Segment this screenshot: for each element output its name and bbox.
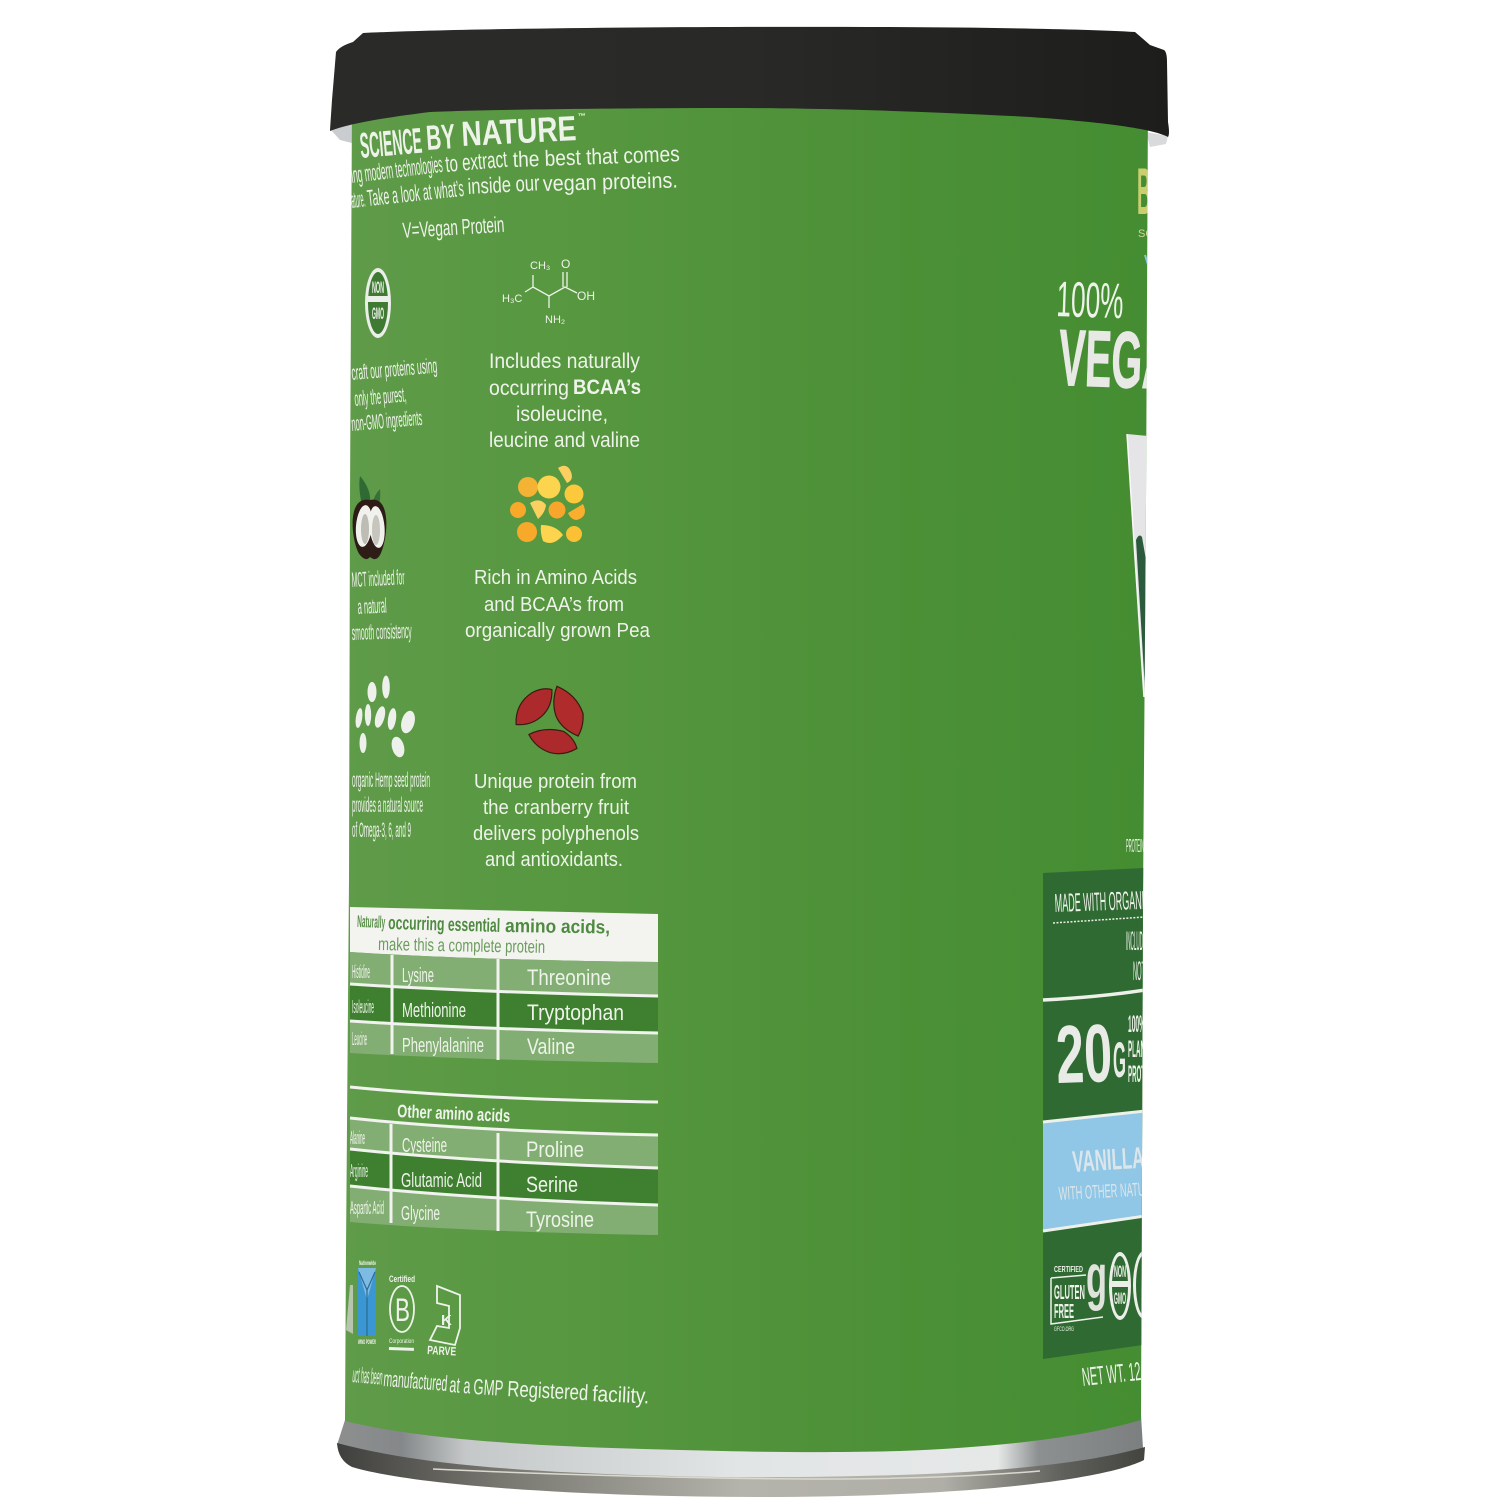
right label content: WITH OTHER NATURAL — [1058, 1179, 1163, 1205]
table: other amino acids: Cysteine — [402, 1135, 447, 1157]
text: GMP statement: manufactured — [383, 1366, 448, 1396]
table: essential amino acids: Threonine — [527, 965, 611, 990]
icon: non-GMO badge — [365, 268, 391, 338]
icon: amino acid molecule: O — [561, 257, 570, 271]
silver rim under lid — [331, 124, 1168, 147]
text: GMP statement: facility. — [592, 1381, 650, 1408]
right label content: B — [1137, 154, 1151, 228]
text: hemp — [352, 769, 430, 842]
headline: 100% vegan — [1058, 282, 1147, 389]
table: other amino acids: Proline — [526, 1137, 584, 1162]
intro text — [352, 148, 680, 208]
intro text: inside our — [467, 170, 540, 199]
icon: amino acid molecule: CH₃ — [530, 260, 550, 272]
icon: certified gluten free: GFCO.ORG — [1054, 1327, 1074, 1333]
headline: 100% vegan: VEGA — [1057, 313, 1172, 406]
table header — [350, 907, 658, 962]
brand letters: SC — [1138, 228, 1153, 240]
text: GMP statement — [352, 1366, 648, 1408]
left label content: organic Hemp seed protein — [352, 769, 430, 792]
text: BCAA: leucine and valine — [489, 429, 640, 452]
black lid — [330, 27, 1169, 137]
dark green panel: PLAN — [1128, 1036, 1145, 1063]
icon: partial logo at edge — [346, 1285, 353, 1334]
left label content — [346, 109, 1172, 1408]
text: BCAA: BCAA’s — [573, 376, 641, 399]
icon: non-GMO badge small — [1109, 1252, 1131, 1320]
text: pea: Rich in Amino Acids — [474, 567, 637, 589]
table header: occurring essential — [388, 913, 500, 937]
heading: science by nature: NATURE — [460, 109, 577, 154]
icon: hemp seeds — [354, 676, 417, 759]
text: pea: organically grown Pea — [465, 620, 651, 642]
text: BCAA: Includes naturally — [489, 350, 640, 373]
icon: certified B corporation — [389, 1274, 415, 1351]
heading: science by nature: SCIENCE — [358, 120, 423, 166]
left label content: non-GMO ingredients — [350, 407, 423, 436]
dark green panel: GMO — [1114, 1289, 1126, 1308]
icon: coconut — [353, 476, 386, 559]
icon: certified gluten free: g — [1086, 1243, 1107, 1312]
table: essential amino acids: Tryptophan — [527, 1000, 624, 1025]
table: other amino acids: Arginine — [350, 1161, 368, 1181]
intro text: vegan proteins. — [542, 167, 678, 196]
table: essential amino acids: Methionine — [402, 1000, 466, 1022]
icon: wind power logo — [358, 1261, 376, 1346]
flavor band: vanilla: VANILLA — [1071, 1142, 1145, 1179]
legend: vegan protein: V=Vegan Protein — [402, 212, 505, 243]
intro text: ature. — [349, 185, 367, 213]
left label content: craft our proteins using — [350, 355, 438, 385]
text: MADE WITH ORGANIC — [1054, 885, 1151, 918]
heading: science by nature — [360, 113, 585, 158]
heading: science by nature: BY — [425, 117, 456, 158]
dark green panel: PROT — [1128, 1061, 1145, 1088]
headline: 100% vegan: 100% — [1056, 271, 1125, 329]
callout: 20g plant protein: G — [1113, 1032, 1126, 1088]
left label content: of Omega-3, 6, and 9 — [352, 819, 411, 842]
text: GMP statement: uct has been — [352, 1362, 384, 1390]
intro text: to extract — [444, 146, 509, 177]
table: other amino acids: Alanine — [350, 1128, 365, 1148]
text: BCAA: occurring — [489, 377, 569, 400]
table: essential amino acids — [350, 907, 658, 1063]
product window — [1127, 434, 1148, 697]
text: non-GMO — [352, 358, 438, 432]
text: INCLUDE — [1126, 926, 1146, 956]
left label content: provides a natural source — [352, 794, 423, 817]
icon: certified gluten free: FREE — [1054, 1301, 1074, 1323]
table: other amino acids: Aspartic Acid — [350, 1198, 384, 1218]
icon: certified B corporation: Corporation — [389, 1339, 414, 1345]
dark green panel — [1042, 868, 1144, 1359]
table header: Naturally — [357, 912, 386, 932]
right label content: NET WT. 12. — [1080, 1356, 1145, 1392]
left label content: GMO — [372, 304, 384, 323]
callout: 20g plant protein — [1058, 1015, 1142, 1083]
text: pea: and BCAA’s from — [484, 594, 624, 616]
dark green panel: NOT — [1133, 956, 1145, 986]
heading: science by nature: ™ — [578, 112, 586, 121]
intro text: the best that comes — [512, 141, 680, 172]
table: other amino acids: Tyrosine — [526, 1207, 594, 1232]
icon: pea protein — [510, 466, 585, 543]
table: essential amino acids: Lysine — [402, 965, 434, 987]
text: cranberry: the cranberry fruit — [483, 797, 629, 819]
text: pea — [465, 567, 651, 642]
text: cranberry — [473, 771, 639, 871]
icon: certified B corporation: Certified — [389, 1274, 415, 1284]
callout: 20g plant protein: 20 — [1054, 1008, 1114, 1101]
icon: certified gluten free: CERTIFIED — [1054, 1265, 1083, 1274]
text: MCT: a natural — [357, 595, 387, 619]
table header: make this a complete protein — [378, 934, 545, 957]
text: cranberry: and antioxidants. — [485, 849, 623, 871]
brand letters — [1138, 168, 1148, 266]
icon: amino acid molecule: H₃C — [502, 293, 522, 305]
canister green body — [345, 100, 1148, 1452]
table: essential amino acids: Phenylalanine — [402, 1035, 484, 1057]
icon: cranberry seeds — [516, 686, 584, 754]
right label content — [1042, 168, 1148, 1386]
text: non-GMO: only the purest, — [353, 384, 407, 411]
icon: kosher parve: PARVE — [427, 1343, 457, 1359]
text: MCT — [351, 566, 412, 645]
dark green panel: 100% — [1128, 1011, 1145, 1038]
canister bottom metal band — [337, 1415, 1145, 1497]
table: essential amino acids: Histidine — [352, 962, 370, 982]
text: BCAA: isoleucine, — [516, 403, 608, 426]
icon: certified B corporation: B — [395, 1292, 410, 1328]
table: essential amino acids: Isoleucine — [352, 997, 374, 1017]
text: GMP statement: Registered — [507, 1376, 589, 1405]
table: essential amino acids: Valine — [527, 1034, 575, 1059]
text: GMP statement: at a — [449, 1372, 472, 1398]
icon: kosher parve: K — [441, 1312, 452, 1329]
left label content: MCT included for — [351, 566, 405, 592]
icon: kosher parve — [427, 1286, 460, 1359]
table: other amino acids: Serine — [526, 1172, 578, 1197]
left label content: smooth consistency — [351, 620, 412, 645]
icon: second badge — [1133, 1252, 1142, 1318]
table header: amino acids, — [505, 916, 610, 938]
text: cranberry: delivers polyphenols — [473, 823, 639, 845]
intro text: Take a look at what’s — [366, 175, 465, 211]
table: other amino acids: Glutamic Acid — [401, 1170, 482, 1192]
icon: non-GMO badge: NON — [372, 278, 384, 297]
table heading: Other amino acids — [397, 1101, 511, 1126]
icon: certified gluten free — [1050, 1264, 1105, 1331]
table: other amino acids: Glycine — [401, 1203, 440, 1225]
intro text: ing modern technologies — [349, 151, 444, 188]
icon: amino acid molecule — [502, 257, 595, 326]
text: GMP statement: GMP — [473, 1374, 504, 1401]
right label content: PROTEIN — [1126, 836, 1144, 856]
icon: wind power logo: Nationwide — [359, 1261, 376, 1267]
text: cranberry: Unique protein from — [474, 771, 637, 793]
table: other amino acids — [350, 1087, 658, 1235]
dark green panel: NON — [1114, 1262, 1126, 1281]
icon: amino acid molecule: OH — [577, 289, 595, 303]
text: BCAA — [489, 350, 641, 452]
flavor band: vanilla — [1042, 1110, 1142, 1232]
table: essential amino acids: Leucine — [352, 1029, 367, 1049]
icon: amino acid molecule: NH₂ — [545, 314, 565, 326]
icon: certified gluten free: GLUTEN — [1054, 1282, 1085, 1304]
left label content: WIND POWER — [358, 1340, 376, 1346]
